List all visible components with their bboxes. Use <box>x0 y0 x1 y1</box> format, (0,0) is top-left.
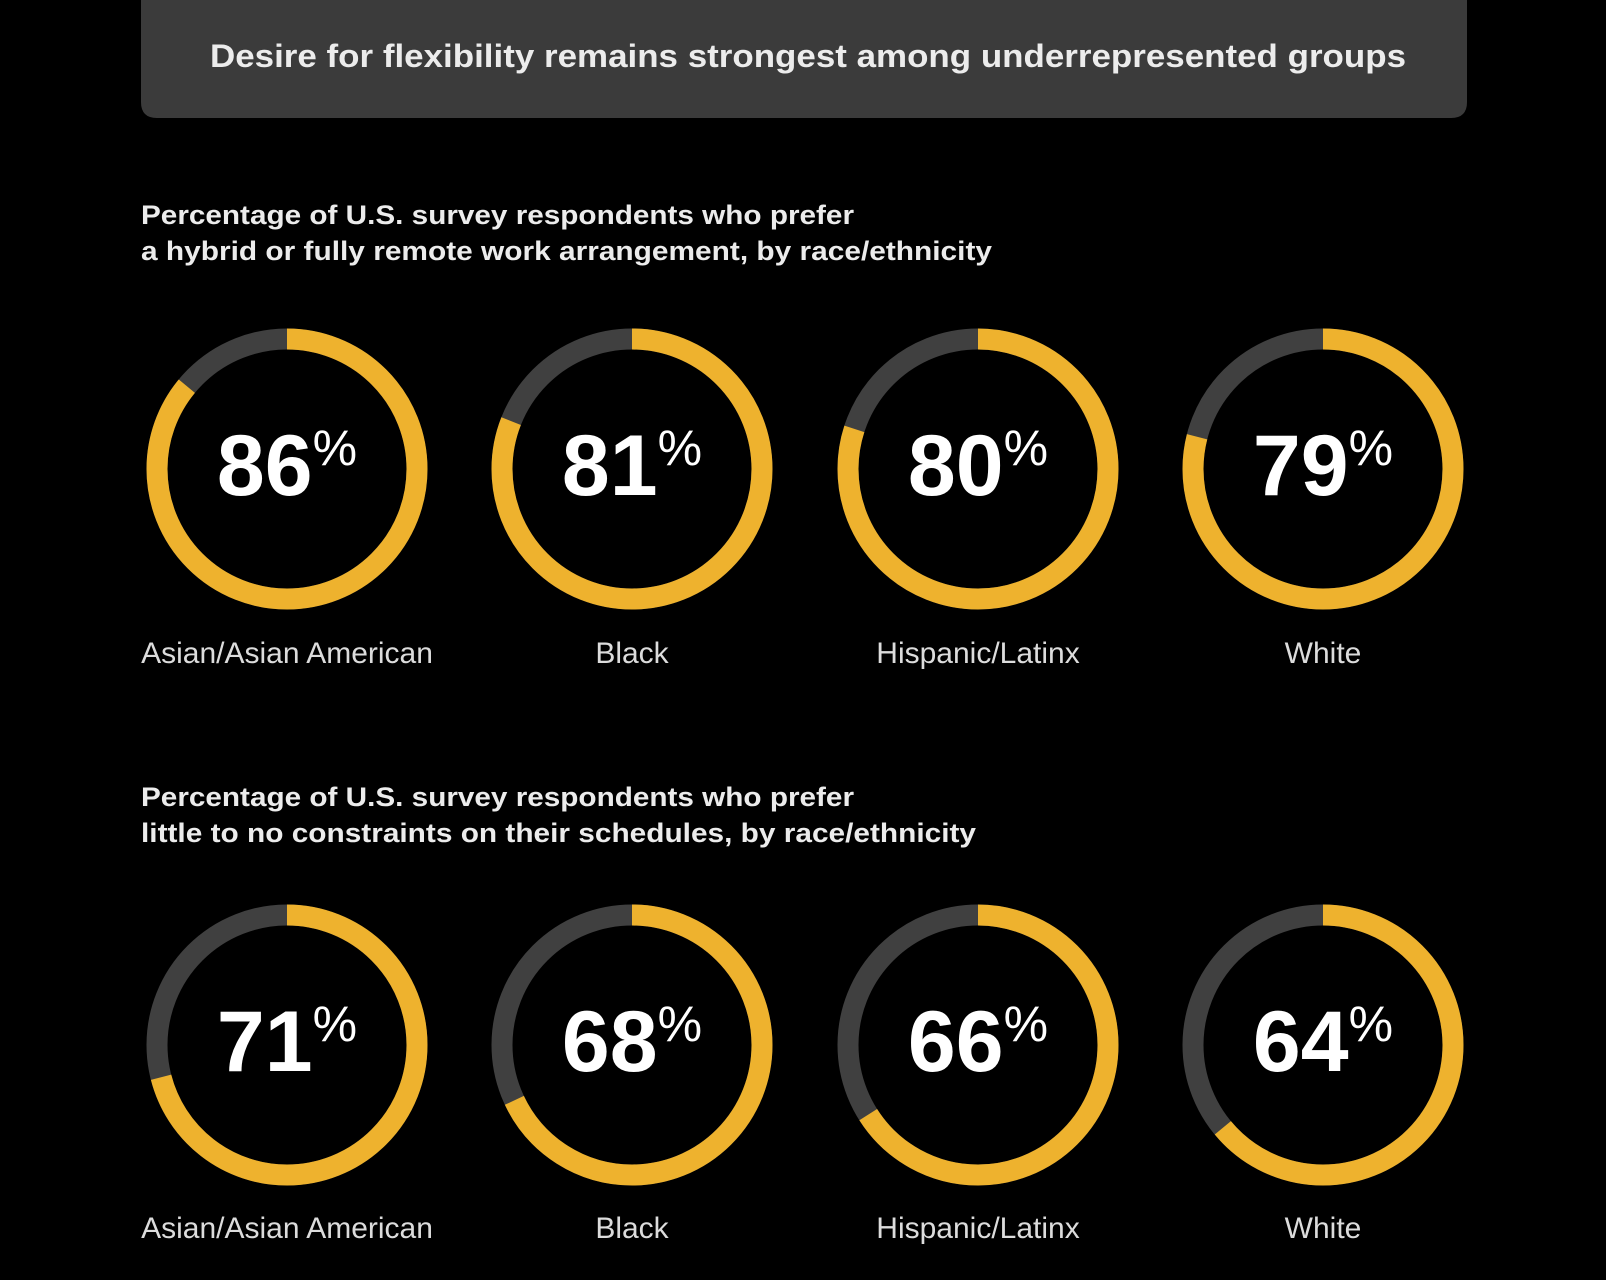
subtitle 1: Percentage of U.S. survey respondents who prefer <box>141 200 855 230</box>
row 2 donut charts <box>141 915 1453 1245</box>
donut: White 79 <box>1193 339 1453 670</box>
donut: White 64: White <box>1285 1212 1361 1245</box>
row 1 donut charts <box>141 339 1453 670</box>
donut: White 79: White <box>1285 637 1361 670</box>
donut: White 64: 64 <box>1253 994 1349 1090</box>
donut: Hispanic 66: 66 <box>908 994 1004 1090</box>
donut: White 64: % <box>1349 996 1393 1052</box>
donut: Hispanic 80: Hispanic/Latinx <box>876 637 1080 670</box>
donut: Black 81: 81 <box>562 418 658 514</box>
donut: Black 68 <box>502 915 762 1245</box>
donut: Black 68: Black <box>595 1212 670 1245</box>
donut: Asian 86: 86 <box>217 418 313 514</box>
donut: Hispanic 80: % <box>1004 420 1048 476</box>
donut: White 79: % <box>1349 420 1393 476</box>
donut: White 64 <box>1193 915 1453 1245</box>
donut: Hispanic 66 <box>848 915 1108 1245</box>
donut: Asian 86 <box>141 339 433 670</box>
donut: Asian 71: % <box>313 996 357 1052</box>
donut: Asian 86: Asian/Asian American <box>141 637 433 670</box>
donut: Asian 71: 71 <box>217 994 313 1090</box>
donut: Hispanic 66: % <box>1004 996 1048 1052</box>
donut: Hispanic 66: Hispanic/Latinx <box>876 1212 1080 1245</box>
header banner <box>141 0 1467 118</box>
donut: Asian 71 <box>141 915 433 1245</box>
subtitle 2: Percentage of U.S. survey respondents who prefer <box>141 782 855 812</box>
donut: White 79: 79 <box>1253 418 1349 514</box>
title: Desire for flexibility remains strongest among underrepresented groups <box>210 38 1406 74</box>
donut: Asian 71: Asian/Asian American <box>141 1212 433 1245</box>
subtitle 1: a hybrid or fully remote work arrangement, by race/ethnicity <box>141 236 992 266</box>
donut: Black 81: % <box>658 420 702 476</box>
donut: Black 81 <box>502 339 762 670</box>
donut: Black 68: % <box>658 996 702 1052</box>
donut: Black 81: Black <box>595 637 670 670</box>
donut: Hispanic 80 <box>848 339 1108 670</box>
donut: Asian 86: % <box>313 420 357 476</box>
subtitle 2: little to no constraints on their schedules, by race/ethnicity <box>141 818 976 848</box>
donut: Hispanic 80: 80 <box>908 418 1004 514</box>
donut: Black 68: 68 <box>562 994 658 1090</box>
